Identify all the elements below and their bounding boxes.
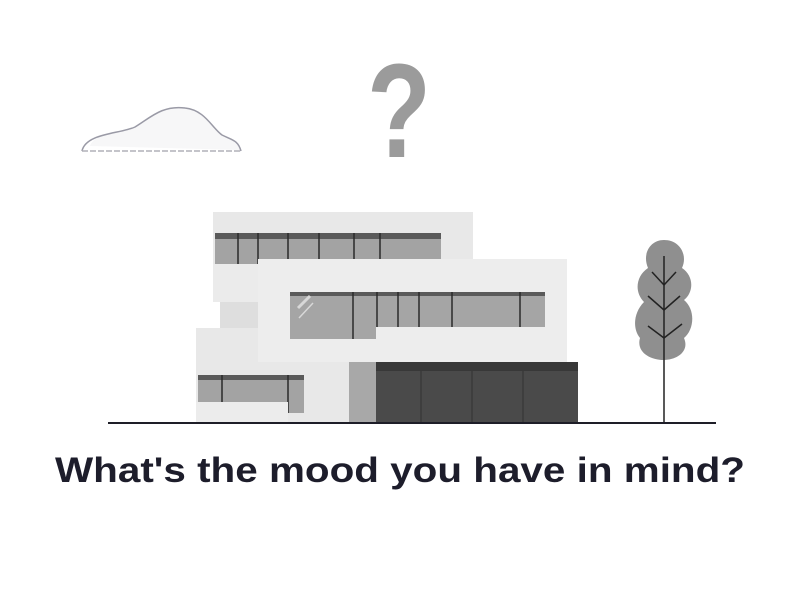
middle frame [258,259,567,362]
top slab [213,212,473,264]
icon: question mark: ? [367,37,431,186]
title: What's the mood you have in mind? [55,451,745,490]
gray column [349,362,376,423]
icon: cloud [82,108,241,151]
garage [376,362,578,423]
upper windows [215,233,441,265]
left mid wall [213,264,263,302]
building [196,212,578,423]
lower-left block [196,328,351,422]
ground line [108,422,716,424]
icon: tree [635,240,692,423]
